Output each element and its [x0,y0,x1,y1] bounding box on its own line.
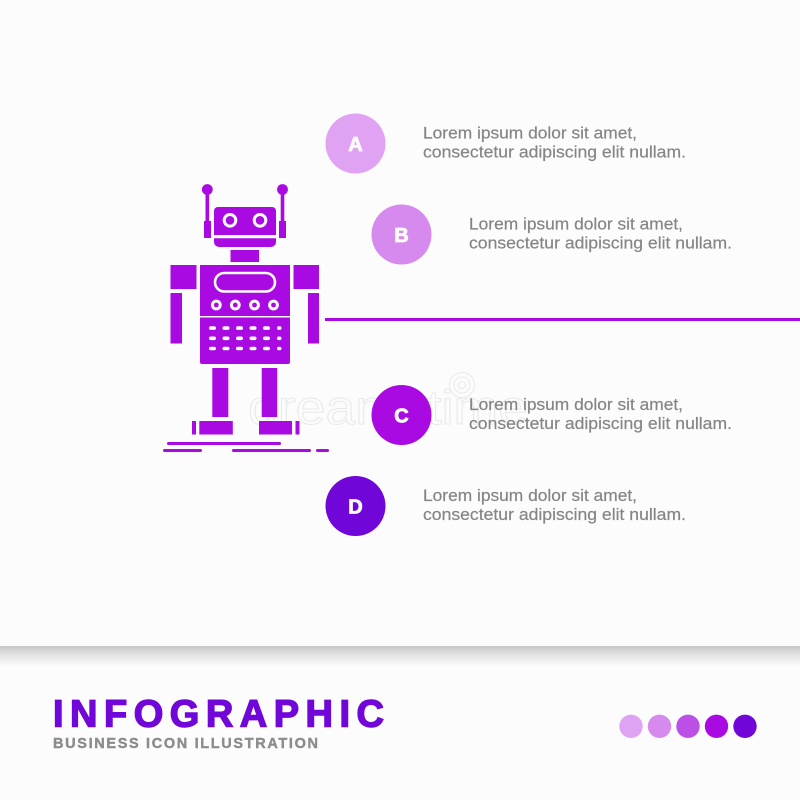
step B: consectetur adipiscing elit nullam. [469,234,732,252]
step A: A [348,134,363,156]
step C: consectetur adipiscing elit nullam. [469,414,732,433]
watermark: dreamstime [248,382,528,435]
step B [372,204,732,264]
robot arms [170,265,319,344]
step B: Lorem ipsum dolor sit amet, [469,214,683,234]
subtitle: BUSINESS ICON ILLUSTRATION [53,736,318,752]
horizontal connector line [325,318,800,321]
title: INFOGRAPHIC [53,694,384,736]
step D: consectetur adipiscing elit nullam. [423,505,686,524]
robot neck [230,250,259,262]
step C [372,385,732,445]
step D: D [348,496,363,518]
step C: Lorem ipsum dolor sit amet, [469,395,683,414]
robot legs [192,368,300,434]
step B: B [394,225,409,247]
colour dots [619,715,757,738]
step D [326,476,686,536]
icon: robot [163,184,329,452]
step A [326,114,686,174]
step A: Lorem ipsum dolor sit amet, [423,124,637,142]
step D: Lorem ipsum dolor sit amet, [423,486,637,505]
step C: C [394,406,409,428]
robot head [214,207,276,247]
step A: consectetur adipiscing elit nullam. [423,142,686,162]
ground lines [163,442,329,452]
robot torso [200,265,290,364]
robot antennas [202,184,288,238]
